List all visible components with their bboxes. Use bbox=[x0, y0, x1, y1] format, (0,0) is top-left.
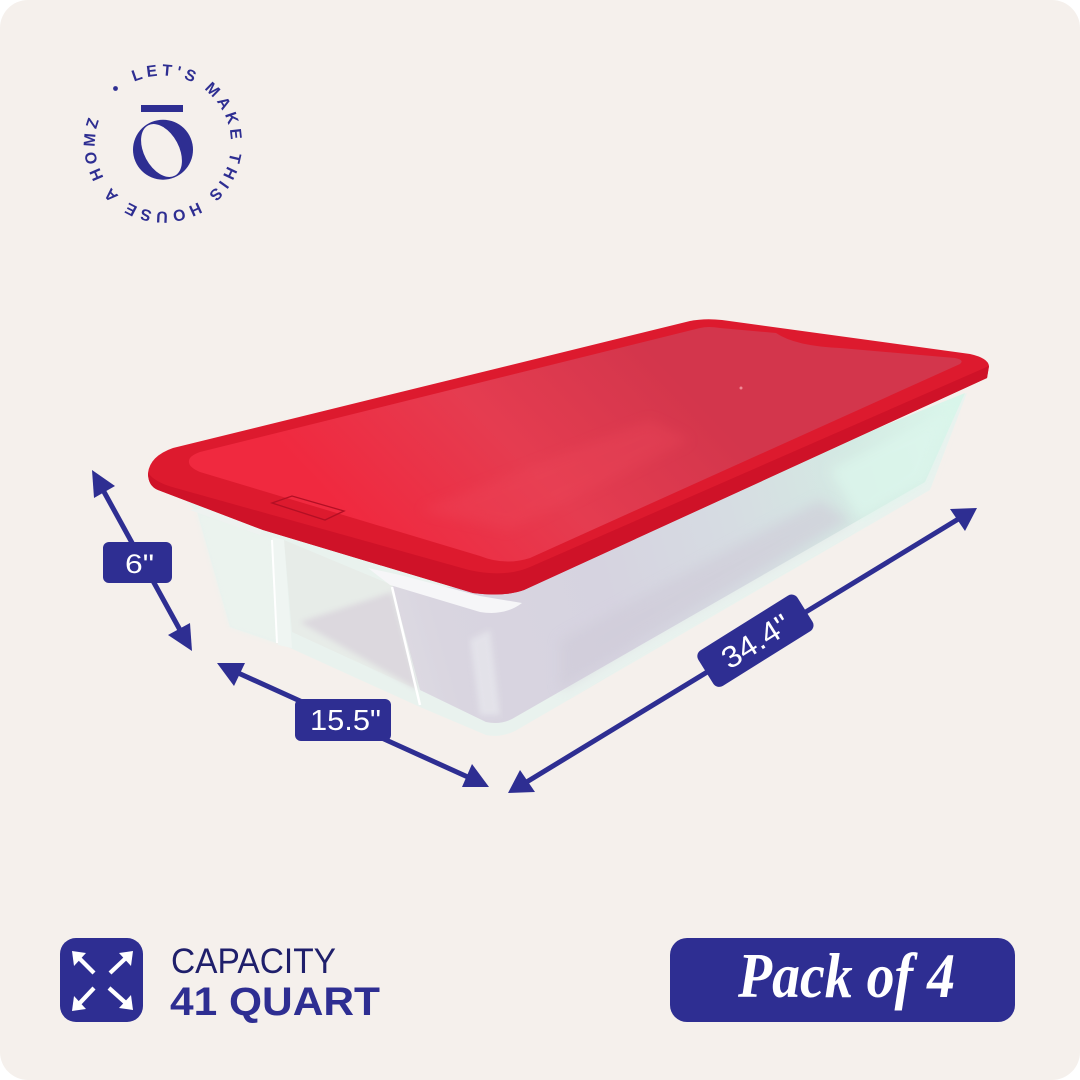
logo bar bbox=[141, 105, 183, 112]
logo letter o bbox=[133, 117, 193, 184]
arrow bbox=[92, 470, 192, 651]
interior tray shade bbox=[300, 592, 418, 690]
logo dot bbox=[113, 86, 118, 91]
dimension: length 34.4 inches bbox=[508, 508, 977, 793]
product: storage box with red lid bbox=[148, 319, 989, 736]
arrow bbox=[508, 508, 977, 793]
lid highlight bbox=[420, 420, 690, 530]
dimension: height 6 inches bbox=[92, 470, 192, 651]
left end bbox=[197, 512, 278, 643]
lid centre dot bbox=[740, 386, 742, 390]
red lid bbox=[148, 319, 989, 594]
front wall bbox=[392, 393, 965, 723]
label: 34.4" bbox=[716, 608, 797, 676]
capacity label: CAPACITY bbox=[171, 942, 336, 981]
badge: pack of 4: Pack of 4 bbox=[737, 941, 955, 1011]
logo ring text: LET'S MAKE THIS HOUSE A HOMZ bbox=[84, 64, 242, 223]
badge: pack of 4 bbox=[670, 938, 1015, 1022]
embossed brand mark bbox=[272, 496, 344, 520]
bottom lip and outline bbox=[185, 393, 967, 736]
label bbox=[103, 542, 172, 583]
capacity block bbox=[60, 938, 380, 1024]
lid top face bbox=[189, 327, 962, 562]
box body bbox=[185, 393, 967, 736]
logo: let's make this house a homz bbox=[84, 64, 242, 223]
label bbox=[695, 592, 816, 690]
handle strip bbox=[368, 568, 522, 613]
lid front band bbox=[148, 366, 989, 594]
arrow bbox=[217, 663, 489, 787]
icon: expand arrows bbox=[60, 938, 143, 1022]
corner ribs bbox=[272, 537, 292, 648]
label bbox=[295, 699, 391, 741]
dimension: width 15.5 inches bbox=[217, 663, 489, 787]
capacity value: 41 QUART bbox=[170, 980, 380, 1024]
label: 6" bbox=[125, 549, 154, 579]
inner left wall bbox=[284, 540, 418, 690]
label: 15.5" bbox=[310, 705, 381, 737]
